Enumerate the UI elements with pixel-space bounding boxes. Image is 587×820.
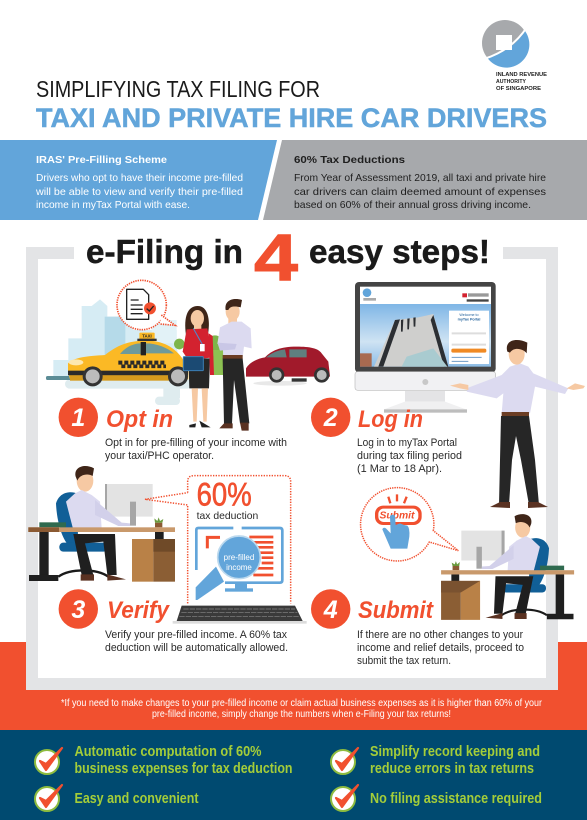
step 1: number badge: 1 bbox=[71, 404, 85, 432]
illustration: submit speech bubble bbox=[361, 488, 458, 561]
logo: IRAS bbox=[482, 20, 547, 92]
panel: benefits bbox=[0, 730, 587, 820]
benefit: easy and convenient: Easy and convenient bbox=[74, 791, 199, 807]
callout: 60% tax deduction: tax deduction bbox=[197, 511, 259, 522]
step 1: description bbox=[105, 437, 287, 462]
taxi: TAXI bbox=[142, 334, 152, 339]
panel: 60% tax deductions bbox=[263, 140, 587, 220]
red car bbox=[246, 347, 330, 386]
illustration: taxi and drivers bbox=[46, 280, 330, 431]
logo: IRAS: OF SINGAPORE bbox=[496, 86, 541, 92]
step 3: description bbox=[105, 629, 288, 654]
step 4: heading: Submit bbox=[358, 597, 434, 624]
footnote bbox=[61, 698, 543, 720]
benefit: no filing assistance bbox=[331, 785, 542, 811]
heading: e-filing in 4 easy steps bbox=[86, 220, 490, 294]
heading: e-filing in 4 easy steps: easy steps! bbox=[309, 233, 490, 270]
road line bbox=[46, 376, 186, 380]
step 4: number badge bbox=[311, 589, 350, 629]
title bbox=[36, 76, 547, 133]
step 3: heading: Verify bbox=[107, 597, 171, 624]
illustration: submit speech bubble: Submit bbox=[379, 511, 415, 522]
benefit: easy and convenient bbox=[35, 785, 199, 811]
skyline bbox=[53, 299, 180, 377]
benefit: simplify record keeping: reduce errors in tax returns bbox=[370, 761, 534, 777]
step 2: heading: Log in bbox=[358, 406, 423, 433]
logo: IRAS: INLAND REVENUE bbox=[496, 72, 547, 78]
callout: 60% tax deduction: 60% bbox=[197, 477, 252, 513]
panel: pre-filling scheme bbox=[0, 140, 277, 220]
heading: e-filing in 4 easy steps: 4 bbox=[254, 220, 298, 294]
taxi bbox=[68, 333, 188, 386]
step 4: description: If there are no other changes to your bbox=[357, 629, 523, 641]
title: TAXI AND PRIVATE HIRE CAR DRIVERS bbox=[36, 103, 547, 133]
step 3: description: Verify your pre-filled income. A 60% tax bbox=[105, 629, 287, 641]
step 2: number badge: 2 bbox=[323, 404, 338, 432]
benefit: simplify record keeping bbox=[331, 744, 540, 777]
step 3: description: deduction will be automatically allowed. bbox=[105, 642, 288, 654]
panel: pre-filling scheme: Drivers who opt to have their income pre-filled bbox=[36, 172, 243, 184]
illustration: driver at desk verifying bbox=[28, 466, 175, 582]
callout: 60% tax deduction: income bbox=[226, 563, 252, 572]
white frame interior bbox=[38, 642, 546, 678]
callout: 60% tax deduction bbox=[145, 476, 307, 624]
step 1: number badge bbox=[59, 398, 98, 437]
trees bbox=[174, 335, 223, 375]
step 4: description: submit the tax return. bbox=[357, 655, 451, 667]
illustration: driver at desk submitting bbox=[441, 514, 574, 620]
panel: pre-filling scheme: IRAS' Pre-Filling Scheme bbox=[36, 154, 167, 166]
step 1: heading: Opt in bbox=[106, 406, 173, 433]
panel: 60% tax deductions: car drivers can claim deemed amount of expenses bbox=[294, 186, 546, 198]
logo: IRAS: AUTHORITY bbox=[496, 79, 526, 85]
step 2: description: (1 Mar to 18 Apr). bbox=[357, 463, 442, 475]
panel: 60% tax deductions: based on 60% of their annual gross driving income. bbox=[294, 199, 531, 211]
benefit: automatic computation bbox=[35, 744, 292, 777]
step 1: description: Opt in for pre-filling of your income with bbox=[105, 437, 287, 449]
illustration: portal on monitor: myTax Portal bbox=[458, 318, 480, 322]
icon: speech bubble with document bbox=[117, 280, 175, 330]
step 2: description: during tax filing period bbox=[357, 450, 462, 462]
footnote: pre-filled income, simply change the numbers when e-Filing your tax returns! bbox=[152, 709, 451, 720]
title: SIMPLIFYING TAX FILING FOR bbox=[36, 76, 320, 102]
panel: pre-filling scheme: will be able to view and verify their pre-filled bbox=[35, 186, 243, 198]
benefit: simplify record keeping: Simplify record keeping and bbox=[370, 744, 540, 760]
woman bbox=[183, 306, 214, 427]
step 4: description: income and relief details, proceed to bbox=[357, 642, 524, 654]
step 4: description bbox=[357, 629, 524, 667]
step 3: number badge: 3 bbox=[71, 596, 85, 624]
steps frame bbox=[26, 247, 558, 690]
heading: e-filing in 4 easy steps: e-Filing in bbox=[86, 233, 243, 270]
step 3: number badge bbox=[59, 589, 98, 629]
illustration: portal on monitor bbox=[355, 282, 496, 413]
illustration: portal on monitor: Welcome to bbox=[459, 313, 479, 317]
ground shadow bbox=[65, 379, 192, 405]
step 2: number badge bbox=[311, 398, 350, 437]
benefit: automatic computation: business expenses for tax deduction bbox=[74, 761, 292, 777]
illustration: man presenting bbox=[450, 340, 585, 508]
orange band bbox=[0, 642, 587, 730]
footnote: *If you need to make changes to your pre-filled income or claim actual business expenses as it is higher than 60% of your bbox=[61, 698, 543, 709]
benefit: automatic computation: Automatic computation of 60% bbox=[74, 744, 262, 760]
panel: 60% tax deductions: From Year of Assessment 2019, all taxi and private hire bbox=[294, 172, 546, 184]
panel: 60% tax deductions: 60% Tax Deductions bbox=[294, 154, 405, 166]
step 2: description bbox=[357, 437, 462, 475]
step 2: description: Log in to myTax Portal bbox=[357, 437, 457, 449]
callout: 60% tax deduction: pre-filled bbox=[224, 553, 254, 562]
benefit: no filing assistance: No filing assistance required bbox=[370, 791, 542, 807]
step 1: description: your taxi/PHC operator. bbox=[105, 450, 214, 462]
man standing bbox=[217, 299, 252, 431]
panel: pre-filling scheme: income in myTax Portal with ease. bbox=[36, 199, 190, 211]
step 4: number badge: 4 bbox=[323, 596, 338, 624]
